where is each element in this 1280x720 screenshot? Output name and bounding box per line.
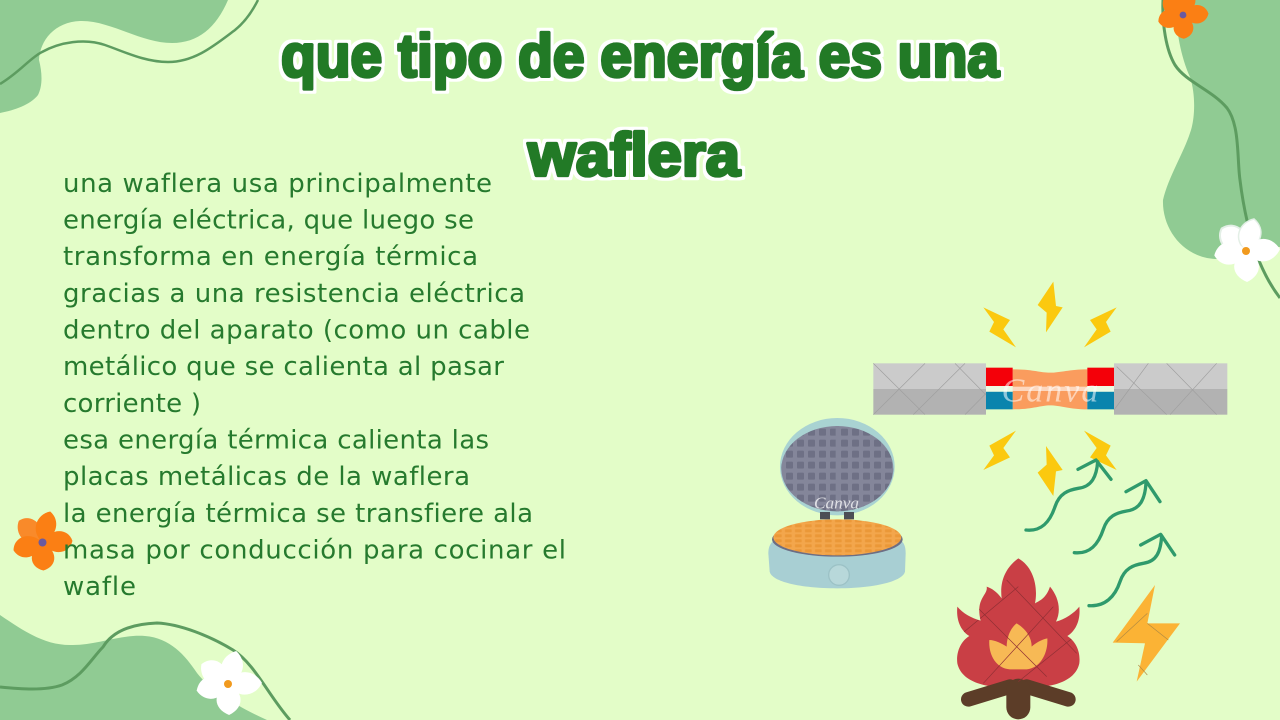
arrows: rising heat [1026, 460, 1175, 606]
flower: orange left [11, 509, 73, 571]
flower: white top right [1213, 216, 1280, 282]
title [281, 22, 1000, 188]
body text: energía eléctrica, que luego se [63, 206, 474, 236]
body text: wafle [63, 572, 136, 602]
flower: white bottom left [194, 648, 262, 715]
body text: transforma en energía térmica [63, 242, 478, 272]
icon: waffle maker: Canva [814, 493, 859, 512]
body text: una waflera usa principalmente [63, 169, 492, 199]
body text: la energía térmica se transfiere ala [63, 499, 533, 529]
body text: placas metálicas de la waflera [63, 462, 470, 492]
body text: dentro del aparato (como un cable [63, 316, 530, 346]
body text [63, 169, 566, 602]
title: que tipo de energía es una [281, 22, 1000, 90]
title: waflera [527, 122, 741, 188]
body text: masa por conducción para cocinar el [63, 536, 566, 566]
icon: waffle maker [768, 418, 906, 588]
flower: orange top right [1156, 0, 1209, 39]
decoration: top-right blob and stem [1163, 0, 1280, 298]
illustration: heated wire: Canva [1002, 373, 1098, 410]
illustration: heated wire [873, 363, 1227, 415]
body text: corriente ) [63, 389, 201, 419]
icon: orange lightning bolt [1113, 585, 1180, 682]
icon: campfire [957, 558, 1080, 707]
body text: gracias a una resistencia eléctrica [63, 279, 525, 309]
icons: yellow lightning bolts [983, 282, 1117, 496]
body text: esa energía térmica calienta las [63, 426, 489, 456]
body text: metálico que se calienta al pasar [63, 352, 504, 382]
decoration: bottom-left blob and stem [0, 615, 290, 720]
decoration: top-left blob and stem [0, 0, 258, 113]
